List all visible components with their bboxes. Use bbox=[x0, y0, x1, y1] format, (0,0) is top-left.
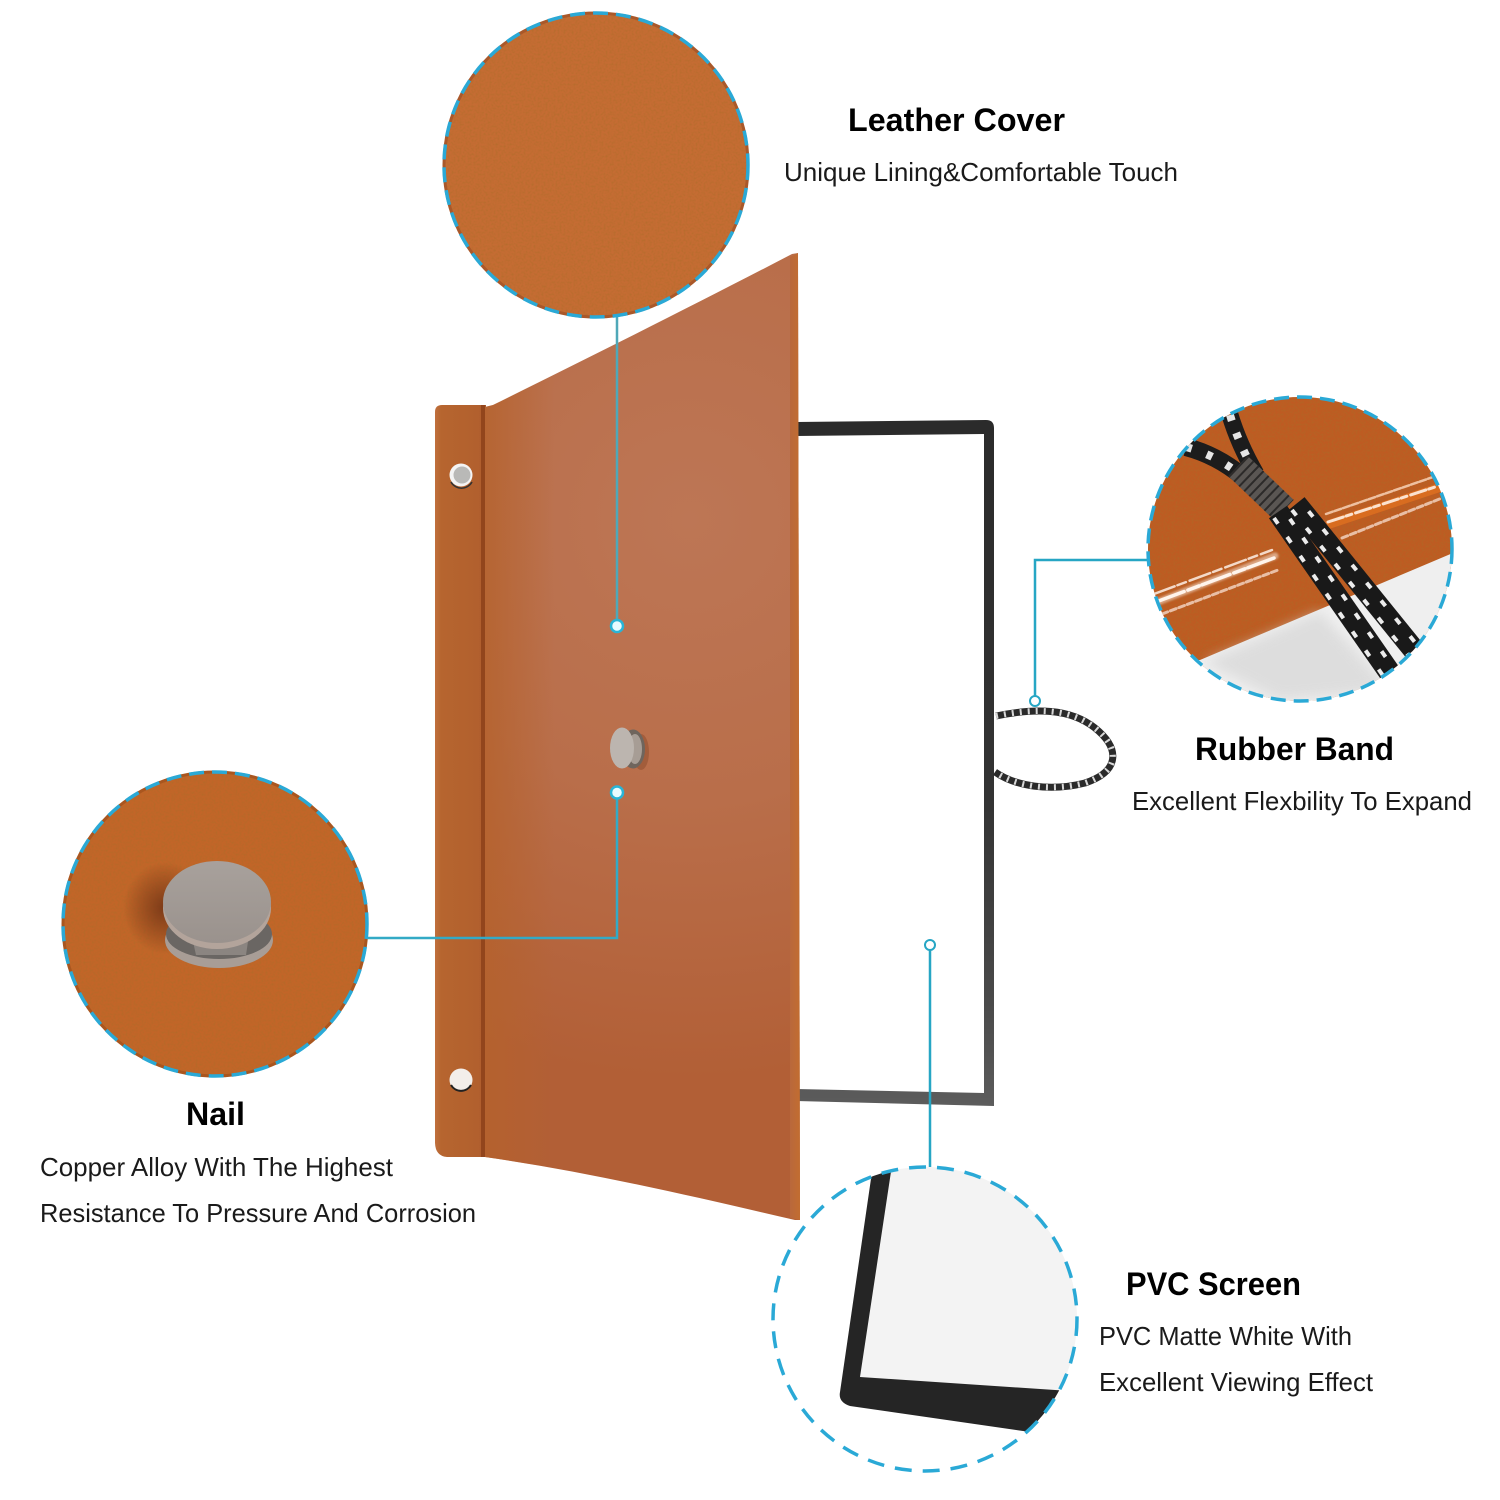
black corner frame bbox=[840, 1165, 1070, 1432]
rope one bbox=[1278, 512, 1392, 676]
label: rubber band: Rubber Band bbox=[1195, 731, 1394, 767]
icon: top eyelet bbox=[450, 464, 472, 488]
ropes bbox=[1186, 415, 1418, 680]
screen: PVC sheet with black frame bbox=[796, 420, 994, 1106]
label: nail: Resistance To Pressure And Corrosion bbox=[40, 1198, 476, 1228]
callout line: nail bbox=[368, 786, 623, 938]
label: nail bbox=[40, 1096, 476, 1228]
label: leather cover bbox=[784, 102, 1178, 187]
icon: metal knob bbox=[163, 861, 273, 968]
label: leather cover: Leather Cover bbox=[848, 102, 1065, 138]
label: nail: Copper Alloy With The Highest bbox=[40, 1152, 394, 1182]
callout line: leather cover bbox=[611, 316, 623, 632]
glossy stitched edge bbox=[1154, 476, 1442, 614]
binder spine strip bbox=[435, 405, 486, 1157]
front leather cover bbox=[485, 253, 800, 1220]
label: PVC screen: Excellent Viewing Effect bbox=[1099, 1367, 1374, 1397]
callout line: PVC screen bbox=[925, 940, 935, 1167]
white screen below cover bbox=[1198, 554, 1452, 701]
label: nail: Nail bbox=[186, 1096, 245, 1132]
icon: cover button bbox=[610, 728, 649, 770]
label: PVC screen: PVC Matte White With bbox=[1099, 1321, 1352, 1351]
label: PVC screen: PVC Screen bbox=[1126, 1266, 1301, 1302]
label: rubber band: Excellent Flexbility To Expand bbox=[1132, 786, 1472, 816]
white screen surface bbox=[860, 1165, 1085, 1395]
label: rubber band bbox=[1132, 731, 1472, 816]
icon: bottom eyelet bbox=[450, 1068, 472, 1092]
rope two bbox=[1296, 504, 1414, 650]
callout line: rubber band bbox=[1030, 560, 1150, 706]
knob shadow bbox=[128, 868, 180, 948]
detail circle: PVC screen bbox=[773, 1165, 1085, 1471]
detail circle: nail bbox=[63, 772, 367, 1076]
rubber band loop bbox=[995, 711, 1113, 787]
label: leather cover: Unique Lining&Comfortable Touch bbox=[784, 157, 1178, 187]
detail circle: rubber band bbox=[1148, 397, 1460, 710]
label: PVC screen bbox=[1099, 1266, 1374, 1397]
detail circle: leather cover bbox=[444, 13, 748, 317]
